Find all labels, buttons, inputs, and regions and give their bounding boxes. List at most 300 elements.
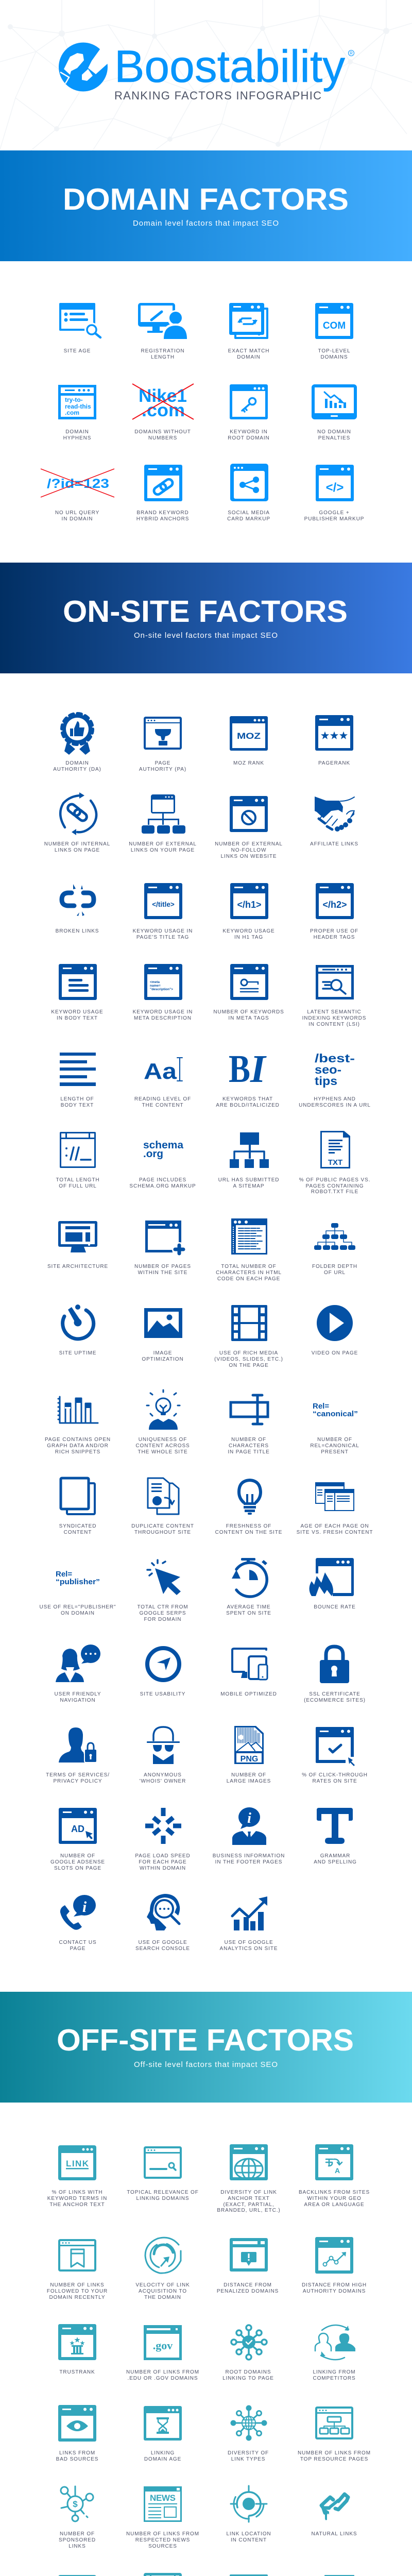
- label: VIDEO ON PAGE: [312, 1350, 358, 1356]
- label: THE DOMAIN: [144, 2295, 181, 2300]
- label: PAGERANK: [318, 760, 350, 766]
- heading: off-site factors: OFF-SITE FACTORS: [57, 2023, 354, 2057]
- icon: LINK window: LINK: [66, 2159, 89, 2168]
- icon: .gov window: [144, 2325, 182, 2360]
- label: NUMBER OF LINKS: [50, 2282, 105, 2288]
- icon: url slug: [315, 1052, 355, 1088]
- label: LINKS ON WEBSITE: [221, 854, 277, 859]
- icon: text lines: [60, 1053, 96, 1086]
- icon: check window: [316, 1727, 355, 1766]
- factor: links followed: [47, 2239, 108, 2300]
- label: SEARCH CONSOLE: [135, 1946, 190, 1952]
- icon: spy: [147, 1727, 180, 1764]
- icon: check hub nodes: [231, 2325, 267, 2360]
- factor: html characters: [216, 1218, 282, 1282]
- icon: man with info bubble: [232, 1807, 266, 1845]
- icon: text window: [59, 964, 97, 1000]
- label: VELOCITY OF LINK: [135, 2282, 190, 2288]
- icon: COM window: COM: [323, 320, 346, 331]
- label: PRESENT: [321, 1449, 349, 1455]
- label: CARD MARKUP: [227, 516, 270, 522]
- factor: edu gov links: [126, 2325, 199, 2381]
- factor: wikipedia: [212, 2574, 285, 2576]
- label: TOTAL LENGTH: [56, 1177, 100, 1183]
- icon: rosette thumbs up: [62, 714, 93, 755]
- label: BAD SOURCES: [56, 2456, 98, 2462]
- label: BOUNCE RATE: [314, 1604, 356, 1610]
- label: RATES ON SITE: [312, 1778, 357, 1784]
- label: URL HAS SUBMITTED: [218, 1177, 279, 1183]
- icon: h1 window: </h1>: [237, 900, 262, 910]
- label: UNIQUENESS OF: [139, 1437, 187, 1443]
- factor: business information: [213, 1807, 285, 1865]
- icon: bold italic letters: I: [250, 1047, 267, 1091]
- label: NUMBER OF: [60, 2531, 95, 2537]
- icon: speedometer: [145, 2238, 181, 2273]
- icon: loading spinner: [145, 1808, 181, 1844]
- icon: stars window: [315, 715, 353, 751]
- icon: two persons exchange: [315, 2325, 355, 2360]
- icon: broken link: [62, 884, 94, 916]
- icon: window sitemap: [142, 794, 185, 834]
- label: USE OF GOOGLE: [224, 1940, 273, 1945]
- label: (VIDEOS, SLIDES, ETC.): [214, 1357, 283, 1362]
- label: OF URL: [324, 1270, 346, 1276]
- label: PENALTIES: [318, 435, 350, 441]
- icon: tree depth: [314, 1223, 355, 1250]
- factor: CTR from SERPs: [137, 1560, 188, 1622]
- label: SLOTS ON PAGE: [54, 1866, 101, 1871]
- label: 'WHOIS' OWNER: [140, 1778, 186, 1784]
- icon: crossed out Nike1.com: .com: [142, 400, 185, 420]
- label: NATURAL LINKS: [312, 2531, 357, 2537]
- icon: hyphen window: [58, 385, 96, 419]
- factor: length of url: [56, 1132, 100, 1189]
- icon: meta window: <meta: [150, 980, 160, 984]
- label: BODY TEXT: [61, 1103, 94, 1108]
- label: MOZ RANK: [233, 760, 264, 766]
- icon: graph bars: [58, 1397, 98, 1423]
- label: AGE OF EACH PAGE ON: [300, 1523, 369, 1529]
- subheading: Off-site level factors that impact SEO: [134, 2060, 278, 2069]
- icon: chain window: [58, 2575, 96, 2576]
- label: LINKS FROM: [59, 2450, 95, 2456]
- label: CODE ON EACH PAGE: [217, 1276, 280, 1282]
- logo subtitle: RANKING FACTORS INFOGRAPHIC: [114, 89, 321, 102]
- factor: uniqueness of content: [135, 1390, 190, 1455]
- icon: ad window: AD: [71, 1824, 84, 1834]
- label: KEYWORD USAGE IN: [133, 928, 193, 934]
- icon: flame window: [309, 1558, 354, 1596]
- icon: no-entry window: [230, 796, 268, 832]
- icon: responsive devices: [232, 1649, 267, 1680]
- label: REL=CANONICAL: [310, 1443, 359, 1449]
- label: GOOGLE +: [319, 510, 350, 516]
- label: DISTANCE FROM: [224, 2282, 272, 2288]
- label: MOBILE OPTIMIZED: [220, 1691, 277, 1697]
- factor: large images: [227, 1726, 271, 1784]
- label: CONTENT: [64, 1530, 92, 1535]
- label: BRAND KEYWORD: [136, 510, 189, 516]
- label: READING LEVEL OF: [134, 1096, 191, 1102]
- label: KEYWORD USAGE: [51, 1009, 104, 1015]
- icon: growth window: [315, 2237, 353, 2274]
- factor: video on page: [312, 1305, 358, 1356]
- factor: image optimization: [142, 1308, 184, 1362]
- label: ROBOT.TXT FILE: [311, 1189, 358, 1195]
- icon: schema.org: schema: [143, 1139, 184, 1151]
- label: RICH SNIPPETS: [55, 1449, 100, 1455]
- label: BUSINESS INFORMATION: [213, 1853, 285, 1859]
- icon: crossed out query string: /?id=123: [47, 477, 109, 491]
- label: IN H1 TAG: [234, 935, 263, 940]
- factor: registration length: [138, 303, 190, 360]
- factor: external no-follow links: [215, 796, 283, 859]
- factor: rel publisher: [40, 1570, 116, 1616]
- subheading: Domain level factors that impact SEO: [133, 219, 279, 228]
- label: AVERAGE TIME: [227, 1604, 270, 1610]
- factor: header tags: [310, 883, 358, 940]
- factor: top resource pages: [298, 2406, 371, 2462]
- label: DOMAIN: [65, 429, 89, 435]
- label: USER FRIENDLY: [55, 1691, 101, 1697]
- label: LINKS ON YOUR PAGE: [131, 848, 195, 853]
- icon: add page window: [145, 1221, 186, 1257]
- label: LARGE IMAGES: [227, 1778, 271, 1784]
- factor: news sources: [126, 2486, 199, 2549]
- factor: trustrank: [58, 2324, 96, 2375]
- label: KEYWORDS THAT: [222, 1096, 273, 1102]
- icon: man with info bubble: i: [247, 1810, 251, 1826]
- label: NO DOMAIN: [317, 429, 351, 435]
- label: SITE VS. FRESH CONTENT: [297, 1530, 373, 1535]
- factor: keyword anchor text: [47, 2145, 107, 2208]
- icon: translate window: A: [335, 2166, 340, 2175]
- factor: top-level domains: [315, 303, 353, 360]
- icon: stacked windows with arrows: [229, 303, 268, 339]
- icon: hyphen window: try-to-: [65, 396, 83, 403]
- label: BACKLINKS FROM SITES: [299, 2190, 370, 2195]
- icon: code window: [231, 1218, 267, 1255]
- label: NUMBER OF: [60, 1853, 95, 1859]
- label: GOOGLE ADSENSE: [50, 1859, 105, 1865]
- label: LENGTH OF: [60, 1096, 94, 1102]
- label: HEADER TAGS: [314, 935, 355, 940]
- factor: body text: [51, 964, 104, 1021]
- label: SYNDICATED: [59, 1523, 96, 1529]
- icon: padlock: [320, 1647, 349, 1683]
- icon: duplicate documents: [148, 1478, 179, 1514]
- factor: diversity of link types: [228, 2405, 269, 2462]
- label: ARE BOLD/ITALICIZED: [216, 1103, 280, 1108]
- factor: competitors: [313, 2325, 356, 2381]
- label: WITHIN DOMAIN: [140, 1866, 186, 1871]
- label: ROOT DOMAIN: [228, 435, 270, 441]
- label: (ECOMMERCE SITES): [304, 1698, 366, 1703]
- icon: key window: [230, 384, 268, 419]
- label: PRIVACY POLICY: [53, 1778, 102, 1784]
- factor: moz rank: [230, 716, 268, 766]
- icon: sitemap window: [315, 2406, 353, 2439]
- icon: growth chart: [232, 1896, 267, 1930]
- factor: characters in title: [228, 1395, 270, 1455]
- registered mark: R: [350, 51, 353, 56]
- factor: age of page: [297, 1482, 373, 1535]
- label: NUMBER OF PAGES: [134, 1264, 191, 1269]
- label: TRUSTRANK: [59, 2369, 95, 2375]
- label: IN CONTENT: [231, 2537, 267, 2543]
- label: DOMAIN: [65, 760, 89, 766]
- registered mark: [348, 50, 354, 56]
- factor: LSI keywords: [302, 965, 366, 1027]
- label: COMPETITORS: [313, 2376, 356, 2381]
- factor: geo backlinks: [299, 2144, 370, 2208]
- icon: meta window: "description">: [150, 988, 173, 991]
- heading: domain factors: DOMAIN FACTORS: [63, 182, 349, 216]
- label: AFFILIATE LINKS: [310, 841, 358, 847]
- label: PUBLISHER MARKUP: [304, 516, 364, 522]
- factor: adsense: [50, 1808, 105, 1871]
- factor: penalized domains: [217, 2238, 279, 2294]
- label: NO-FOLLOW: [231, 848, 266, 853]
- icon: schema.org: .org: [143, 1148, 163, 1160]
- label: IN META TAGS: [228, 1015, 269, 1021]
- label: KEYWORD TERMS IN: [47, 2196, 107, 2201]
- icon: uptime gauge: [63, 1304, 94, 1339]
- factor: time on site: [226, 1558, 271, 1616]
- factor: link velocity: [135, 2238, 190, 2300]
- label: NAVIGATION: [60, 1698, 96, 1703]
- factor: topical relevance: [127, 2146, 199, 2201]
- label: NUMBER OF: [231, 1437, 266, 1443]
- icon: PNG document: PNG: [241, 1755, 258, 1764]
- icon: bold italic letters: [229, 1047, 267, 1091]
- label: SITE UPTIME: [59, 1350, 96, 1356]
- factor: syndicated content: [59, 1478, 96, 1535]
- label: LENGTH: [151, 354, 175, 360]
- label: ROOT DOMAINS: [226, 2369, 271, 2375]
- label: FOLDER DEPTH: [312, 1264, 357, 1269]
- icon: crossed out Nike1.com: Nike1: [139, 386, 187, 406]
- heading: on-site factors: ON-SITE FACTORS: [63, 595, 348, 629]
- icon: compass: [147, 1648, 179, 1680]
- label: TOPICAL RELEVANCE OF: [127, 2190, 199, 2195]
- factor: open graph: [45, 1397, 111, 1455]
- label: HYPHENS AND: [314, 1096, 356, 1102]
- label: OF FULL URL: [59, 1183, 97, 1189]
- label: DOMAINS: [321, 354, 348, 360]
- icon: woman and speech bubble: [56, 1645, 100, 1682]
- logo swirl mark: [59, 42, 111, 92]
- factor: natural links: [312, 2494, 357, 2537]
- label: REGISTRATION: [141, 348, 185, 354]
- label: NUMBER OF: [317, 1437, 352, 1443]
- label: THE WHOLE SITE: [138, 1449, 188, 1455]
- label: LINKING TO PAGE: [222, 2376, 274, 2381]
- icon: monitor with blog: [144, 2573, 182, 2576]
- label: TOTAL CTR FROM: [137, 1604, 188, 1610]
- label: IN BODY TEXT: [57, 1015, 98, 1021]
- factor: bold italic keywords: [216, 1047, 280, 1108]
- icon: newspaper window: [144, 2486, 182, 2522]
- label: NUMBER OF: [231, 1772, 266, 1778]
- factor: contact us page: [59, 1895, 97, 1952]
- factor: no domain penalties: [312, 384, 357, 441]
- icon: monitor layout: [58, 1221, 97, 1252]
- icon: trophy window: [144, 717, 182, 750]
- factor: pagerank: [315, 715, 353, 766]
- icon: warning window: [230, 2238, 268, 2272]
- factor: rel canonical: [310, 1402, 359, 1455]
- panel: off-site factor grid: [39, 2144, 374, 2576]
- label: META DESCRIPTION: [134, 1015, 192, 1021]
- factor: root domains: [222, 2325, 274, 2381]
- icon: rel publisher text: [56, 1570, 100, 1586]
- icon: magnifier window: [316, 965, 354, 999]
- icon: site age: [59, 303, 100, 337]
- label: NUMBER OF LINKS FROM: [298, 2450, 371, 2456]
- label: NUMBER OF INTERNAL: [44, 841, 110, 847]
- factor: folder depth: [312, 1223, 357, 1276]
- icon: film strip: [231, 1305, 267, 1341]
- label: THROUGHOUT SITE: [134, 1530, 191, 1535]
- label: PAGE: [70, 1946, 85, 1952]
- factor: diversity of anchor text: [217, 2144, 281, 2213]
- factor: terms of service: [46, 1727, 110, 1784]
- icon: play button: [317, 1305, 353, 1341]
- factor: site architecture: [47, 1221, 108, 1269]
- factor: sponsored links: [59, 2486, 96, 2549]
- label: NO URL QUERY: [55, 510, 99, 516]
- label: DISTANCE FROM HIGH: [302, 2282, 367, 2288]
- icon: light bulb: [239, 1480, 261, 1515]
- icon: code window: </>: [326, 481, 344, 495]
- label: % OF PUBLIC PAGES VS.: [299, 1177, 370, 1183]
- label: CHARACTERS: [229, 1443, 269, 1449]
- label: WITHIN THE SITE: [138, 1270, 187, 1276]
- label: (EXACT, PARTIAL,: [223, 2202, 274, 2208]
- label: AND SPELLING: [314, 1859, 357, 1865]
- label: PROPER USE OF: [310, 928, 358, 934]
- label: PAGE: [155, 760, 170, 766]
- factor: brand keyword hybrid anchors: [136, 465, 189, 522]
- label: % OF LINKS WITH: [52, 2190, 103, 2195]
- label: LINKING: [151, 2450, 175, 2456]
- label: USE OF GOOGLE: [138, 1940, 187, 1945]
- icon: dollar nodes: $: [73, 2499, 78, 2509]
- factor: page load speed: [135, 1808, 191, 1871]
- band: on-site factors: [0, 563, 412, 673]
- factor: ssl certificate: [304, 1647, 366, 1703]
- label: TERMS OF SERVICES/: [46, 1772, 110, 1778]
- icon: bold italic letters: B: [229, 1047, 250, 1091]
- label: TOP-LEVEL: [318, 348, 350, 354]
- band: domain factors: [0, 150, 412, 261]
- factor: reading level: [134, 1058, 191, 1108]
- factor: internal links: [44, 792, 110, 853]
- icon: phone with info: i: [82, 1899, 87, 1916]
- factor: google + publisher markup: [304, 465, 364, 522]
- icon: rel publisher text: Rel=: [56, 1570, 72, 1579]
- icon: MOZ window: MOZ: [237, 731, 261, 741]
- icon: rel publisher text: “publisher”: [56, 1578, 100, 1586]
- icon: multiple windows: [315, 1482, 354, 1511]
- label: ON DOMAIN: [61, 1611, 95, 1616]
- label: BROKEN LINKS: [56, 928, 99, 934]
- label: ANALYTICS ON SITE: [220, 1946, 278, 1952]
- icon: hyphen window: read-this: [65, 403, 91, 410]
- factor: grammar and spelling: [314, 1808, 357, 1865]
- icon: click cursor: [147, 1560, 181, 1595]
- factor: social media card markup: [227, 464, 270, 522]
- label: LINKS ON PAGE: [55, 848, 100, 853]
- icon: Aa text cursor: Aa: [144, 1059, 177, 1084]
- label: FOR DOMAIN: [144, 1617, 181, 1622]
- label: LINKS: [68, 2544, 86, 2549]
- icon: hourglass window: [144, 2406, 182, 2441]
- label: FOLLOWED TO YOUR: [47, 2289, 108, 2294]
- label: FRESHNESS OF: [226, 1523, 271, 1529]
- icon: schema.org: [143, 1139, 184, 1160]
- label: PAGE LOAD SPEED: [135, 1853, 191, 1859]
- factor: h1 tag: [222, 883, 275, 940]
- label: ON THE PAGE: [229, 1363, 269, 1368]
- label: IN PAGE TITLE: [228, 1449, 270, 1455]
- label: SITE AGE: [64, 348, 91, 354]
- label: IN CONTENT (LSI): [308, 1022, 360, 1027]
- icon: meta window: name=: [150, 984, 161, 988]
- band: off-site factors: [0, 1992, 412, 2103]
- label: DIVERSITY OF LINK: [220, 2190, 277, 2195]
- icon: url window: [60, 1132, 96, 1168]
- label: AREA OR LANGUAGE: [304, 2202, 365, 2208]
- icon: TXT document: TXT: [328, 1158, 342, 1167]
- icon: idea head: [147, 1390, 180, 1430]
- icon: bug window: [315, 2575, 354, 2576]
- label: RESPECTED NEWS: [135, 2537, 190, 2543]
- logo: Boostability ranking factors infographic: [59, 41, 354, 102]
- icon: hyphen window: .com: [65, 409, 79, 416]
- label: GRAPH DATA AND/OR: [47, 1443, 109, 1449]
- label: CONTACT US: [59, 1940, 97, 1945]
- label: .EDU OR .GOV DOMAINS: [128, 2376, 198, 2381]
- icon: rel canonical text: Rel=: [313, 1402, 329, 1411]
- label: GRAMMAR: [320, 1853, 350, 1859]
- icon: wikipedia window: [230, 2574, 268, 2576]
- label: CONTENT ON THE SITE: [215, 1530, 282, 1535]
- label: USE OF REL="PUBLISHER": [40, 1604, 116, 1610]
- icon: key and lines window: [230, 964, 268, 1000]
- label: ACQUISITION TO: [139, 2289, 187, 2294]
- factor: real sites vs splogs: [295, 2575, 374, 2576]
- label: LINKING FROM: [313, 2369, 356, 2375]
- label: HYPHENS: [63, 435, 91, 441]
- label: LATENT SEMANTIC: [307, 1009, 362, 1015]
- icon: rel canonical text: [313, 1402, 358, 1418]
- label: GOOGLE SERPS: [140, 1611, 186, 1616]
- factor: site usability: [140, 1648, 185, 1697]
- label: KEYWORD USAGE: [222, 928, 275, 934]
- factor: bad sources: [56, 2405, 98, 2462]
- label: THE ANCHOR TEXT: [49, 2202, 105, 2208]
- label: BRANDED, URL, ETC.): [217, 2208, 281, 2213]
- label: PAGES CONTAINING: [306, 1183, 364, 1189]
- factor: title tag: [133, 883, 193, 940]
- factor: contextual links: [48, 2575, 106, 2576]
- icon: target: [231, 2486, 267, 2522]
- icon: title window: </title>: [152, 901, 175, 908]
- icon: globe nodes: [231, 2405, 267, 2441]
